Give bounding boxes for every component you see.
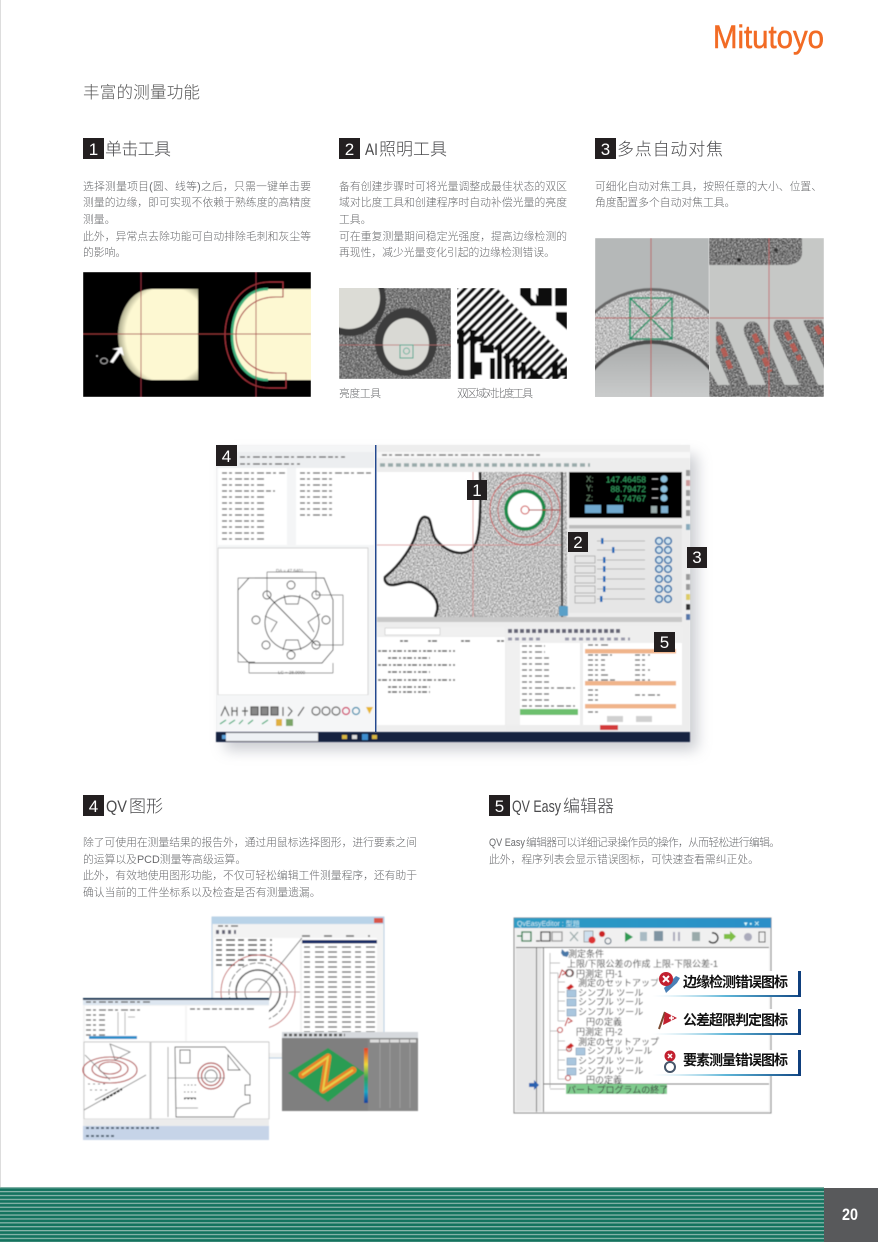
panel: 4 QV graphics	[83, 795, 418, 1140]
title bar	[514, 918, 771, 928]
panel: DRO readout: 147.46458	[606, 474, 646, 484]
panel: results	[377, 637, 505, 725]
badge 5: 5	[660, 633, 669, 652]
icon: current-line arrow	[529, 1080, 539, 1090]
text block 2	[339, 179, 567, 259]
logo: Mitutoyo: Mitutoyo	[713, 19, 824, 55]
text block 2: 可在重复测量期间稳定光强度，提高边缘检测的	[339, 229, 567, 243]
program tree: 測定のセットアップ	[578, 977, 659, 988]
text block 1	[83, 179, 311, 259]
heading 5: 编辑器	[563, 797, 614, 816]
text block 2: 备有创建步骤时可将光量调整成最佳状态的双区	[339, 179, 567, 193]
callout: tolerance judgement icon	[650, 1009, 801, 1035]
panel: 3 multi-point autofocus	[595, 138, 824, 397]
icon: tolerance flag	[659, 1012, 677, 1029]
text block 4: 除了可使用在测量结果的报告外，通过用鼠标选择图形，进行要素之间	[83, 835, 417, 849]
heading 2	[339, 138, 447, 159]
heading 4	[83, 795, 163, 816]
icon: feature error	[664, 1050, 676, 1072]
text block 5	[489, 835, 780, 866]
text block 3	[595, 179, 822, 209]
callout: feature measurement error icon: 要素测量错误图标	[683, 1052, 788, 1068]
page title: 丰富的测量功能	[83, 83, 200, 102]
program tree: シンプル ツール	[578, 997, 643, 1007]
graphic: 3D perspective part	[83, 1044, 146, 1110]
program tree	[550, 948, 718, 1095]
label: dimension bottom: LC = 28.0000	[278, 670, 306, 675]
panel: main software screenshot	[216, 445, 707, 750]
text block 3: 可细化自动对焦工具，按照任意的大小、位置、	[595, 179, 822, 193]
screenshot: measurement result window	[212, 917, 384, 1058]
program tree: 円測定 円-1	[576, 968, 623, 979]
program tree: パート プログラムの終了	[567, 1084, 668, 1095]
callout: feature measurement error icon	[650, 1050, 801, 1076]
text block 1: 的影响。	[83, 245, 126, 259]
label: dimension: DA = 47.6401	[276, 568, 304, 573]
heading 4: 4	[89, 797, 98, 816]
heading 1: 单击工具	[105, 140, 171, 159]
title bar: QvEasyEditor : 型題	[517, 919, 580, 928]
callout: edge detection error icon	[650, 971, 801, 997]
text block 4	[83, 835, 417, 899]
icon column	[686, 470, 690, 620]
image: dual-area contrast tool	[457, 288, 567, 379]
badge 2	[568, 532, 588, 552]
page number block	[824, 1188, 878, 1242]
heading 5	[489, 795, 614, 816]
panel: DRO readout: Z:	[586, 494, 593, 503]
program tree: 測定のセットアップ	[578, 1036, 659, 1047]
text block 5: 编辑器可以详细记录操作员的操作，从而轻松进行编辑。	[526, 835, 780, 849]
program tree: 円の定義	[586, 1016, 622, 1027]
badge 1	[467, 480, 487, 500]
program tree: シンプル ツール	[578, 1056, 643, 1066]
heading 1: 1	[89, 140, 98, 159]
panel: 1 single-click tool	[83, 138, 318, 397]
taskbar	[216, 732, 690, 742]
graphic: measured plate drawing	[238, 572, 343, 673]
text block 4: 的运算以及PCD测量等高级运算。	[83, 852, 246, 866]
program tree: シンプル ツール	[578, 1007, 643, 1017]
left window: graphics	[217, 445, 374, 732]
title bar: ▾ ▪ ✕	[744, 921, 760, 928]
heading 1	[83, 138, 171, 159]
image: brightness tool	[339, 288, 451, 379]
icon row: graphics toolbar	[220, 707, 373, 726]
panel: DRO readout: 4.74767	[615, 494, 646, 504]
icon: edge error	[659, 972, 680, 993]
screenshot: QV Easy editor window	[514, 918, 771, 1113]
program tree: シンプル ツール	[578, 988, 643, 998]
right window: camera view	[377, 445, 690, 732]
badge 5	[654, 632, 675, 652]
text block 2: 再现性，减少光量变化引起的边缘检测错误。	[339, 245, 555, 259]
heading 2: AI	[365, 140, 378, 159]
badge 3	[687, 547, 707, 568]
program tree: シンプル ツール	[578, 1066, 643, 1076]
program tree: 円測定 円-2	[576, 1026, 623, 1037]
callout: tolerance judgement icon: 公差超限判定图标	[683, 1012, 788, 1028]
image: autofocus right	[709, 238, 824, 397]
badge 2: 2	[573, 533, 583, 552]
heading 3: 多点自动对焦	[617, 140, 723, 159]
text block 5: 此外，程序列表会显示错误图标，可快速查看需纠正处。	[489, 852, 759, 866]
heading 5: QV Easy	[512, 797, 561, 816]
program tree: 上限/下限公差の作成 上限-下限公差-1	[567, 958, 718, 969]
text block 2: 域对比度工具和创建程序时自动补偿光量的亮度	[339, 195, 567, 209]
divider	[375, 445, 376, 732]
panel: DRO readout: Y:	[586, 484, 593, 493]
panel: DRO readout	[569, 472, 682, 518]
screenshot: CAD graphics window	[83, 998, 269, 1140]
toolbar icons	[517, 931, 765, 944]
heading 4: 图形	[129, 797, 163, 816]
text block 3: 角度配置多个自动对焦工具。	[595, 195, 735, 209]
callout: edge detection error icon: 边缘检测错误图标	[683, 974, 788, 990]
badge 3: 3	[692, 548, 702, 567]
badge 4: 4	[222, 447, 231, 466]
text block 1: 测量。	[83, 213, 115, 226]
panel: 5 QV Easy editor	[489, 795, 801, 1113]
text block 4: 此外，有效地使用图形功能，不仅可轻松编辑工件测量程序，还有助于	[83, 868, 417, 882]
heading 2: 照明工具	[379, 140, 447, 159]
heading 2: 2	[345, 140, 354, 159]
caption: dual-area contrast tool: 双区域对比度工具	[457, 386, 533, 400]
badge 1: 1	[472, 481, 482, 500]
text block 2: 工具。	[339, 213, 371, 226]
badge 4	[216, 445, 237, 466]
caption: brightness tool: 亮度工具	[339, 387, 381, 400]
image: edge detection on rounded part	[83, 272, 318, 397]
program tree: 測定条件	[568, 948, 604, 959]
program tree: 円の定義	[586, 1074, 622, 1085]
program tree: シンプル ツール	[587, 1046, 652, 1056]
panel: lighting sliders	[569, 525, 682, 613]
heading 4: QV	[106, 797, 128, 816]
graphic: 2D part drawing	[168, 1047, 250, 1117]
page number block: 20	[842, 1205, 858, 1224]
text block 4: 确认当前的工件坐标系以及检查是否有测量遗漏。	[83, 885, 321, 899]
text block 1: 选择测量项目(圆、线等)之后，只需一键单击要	[83, 179, 311, 193]
image: autofocus left	[595, 238, 709, 397]
screenshot: 3D surface map	[282, 1032, 418, 1111]
panel: program editor	[506, 627, 682, 725]
text block 1: 测量的边缘，即可实现不依赖于熟练度的高精度	[83, 195, 311, 209]
panel: DRO readout: 88.79472	[611, 484, 646, 494]
heading 3: 3	[601, 140, 610, 159]
heading 5: 5	[495, 797, 504, 816]
panel: 2 AI lighting tool	[339, 138, 567, 398]
footer band	[0, 1187, 824, 1242]
panel: DRO readout: X:	[586, 475, 594, 484]
text block 1: 此外，异常点去除功能可自动排除毛刺和灰尘等	[83, 229, 311, 243]
text block 5: QV Easy	[489, 837, 526, 849]
image: camera workpiece	[377, 472, 567, 617]
